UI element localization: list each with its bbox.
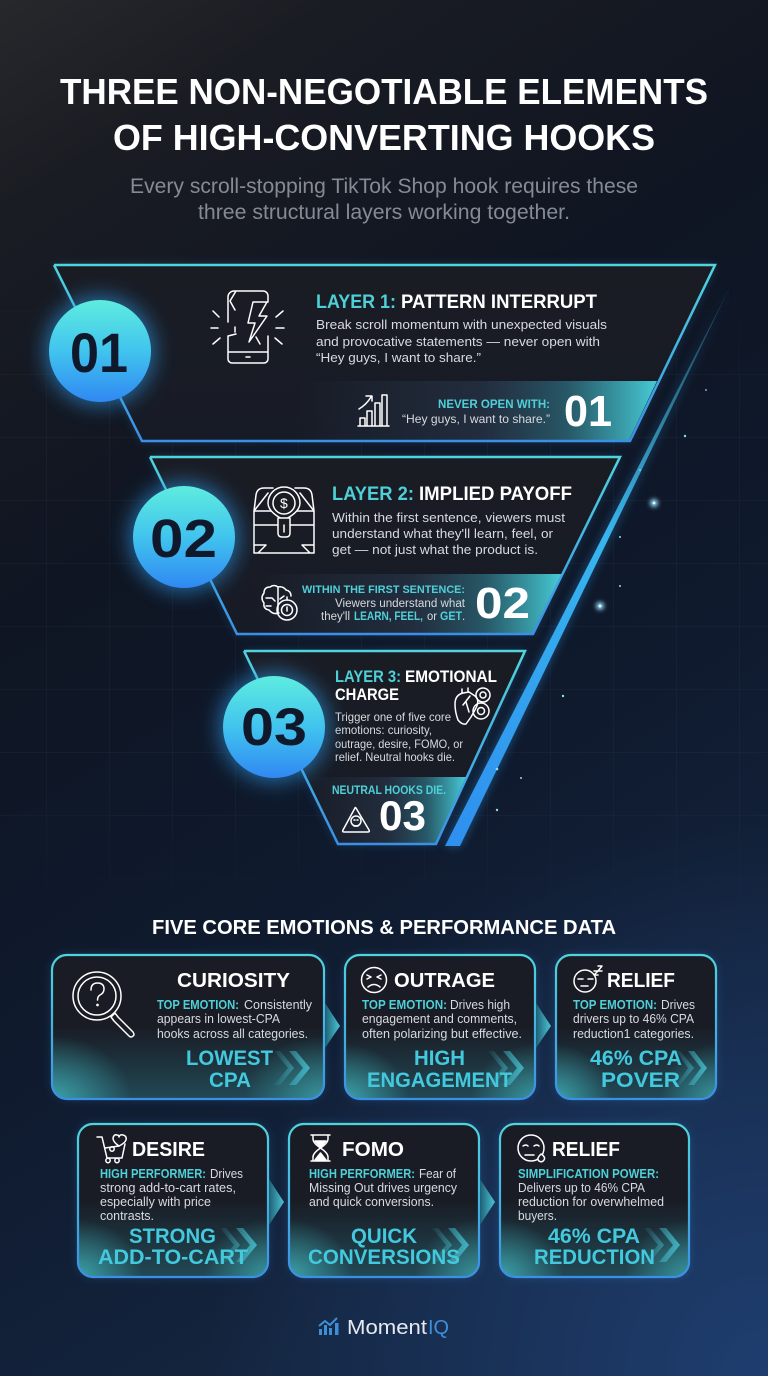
curiosity description: TOP EMOTION: [157,998,239,1012]
outrage metric: HIGH [414,1046,465,1070]
chevrons [488,1051,524,1085]
relief simplification metric: 46% CPA [548,1224,640,1248]
layer 2 callout [302,579,530,628]
section heading: FIVE CORE EMOTIONS & PERFORMANCE DATA [152,916,616,939]
outrage metric [367,1046,512,1092]
subtitle [130,175,638,224]
relief simplification heading: RELIEF [552,1139,620,1161]
layer 3 callout: 03 [379,792,426,839]
outrage description: engagement and comments, [362,1012,517,1026]
icon: magnifying glass with question mark [73,972,134,1037]
relief description: reduction1 categories. [573,1027,694,1041]
layer 1 description: Break scroll momentum with unexpected visuals [316,317,608,332]
outrage metric: ENGAGEMENT [367,1068,512,1092]
desire description: HIGH PERFORMER: [100,1167,206,1181]
layer 2 callout: or [427,611,437,623]
icon: anatomical heart with emotion faces [455,688,490,724]
number badge 02 [129,482,239,592]
desire description: contrasts. [100,1209,154,1223]
relief description: Drives [661,998,695,1012]
chevrons [432,1228,469,1262]
fomo metric: CONVERSIONS [308,1245,460,1269]
relief simplification description: Delivers up to 46% CPA [518,1181,646,1195]
relief simplification description: reduction for overwhelmed [518,1195,664,1209]
layer 3 heading: LAYER 3: [335,668,401,686]
sparkle particles [496,389,707,811]
icon: rising bar chart [358,395,389,426]
relief metric: 46% CPA [590,1046,682,1070]
icon: warning triangle with skull [343,808,369,832]
layer 1 description: and provocative statements — never open with [316,334,600,349]
fomo description [309,1167,458,1209]
chevrons [220,1228,257,1262]
icon: shopping cart with heart [97,1135,126,1163]
layer 1 heading [316,292,597,313]
layer 2 heading: IMPLIED PAYOFF [419,484,572,505]
fomo description: Fear of [419,1167,456,1181]
subtitle: three structural layers working together. [198,201,570,224]
desire description: Drives [210,1167,243,1181]
layer 2 description: get — not just what the product is. [332,542,538,557]
outrage description [362,998,522,1041]
icon: brain with stopwatch [262,586,297,620]
number badge 01 [45,296,155,406]
layer 2 callout: WITHIN THE FIRST SENTENCE: [302,584,465,596]
icon: sleeping face [574,966,602,992]
curiosity metric: CPA [209,1068,251,1092]
outrage description: often polarizing but effective. [362,1027,522,1041]
fomo metric: QUICK [351,1224,417,1248]
curiosity description: Consistently [244,998,313,1012]
logo mark [319,1318,338,1335]
layer 2 description: Within the first sentence, viewers must [332,510,565,525]
icon: treasure chest with coin [254,487,314,553]
relief metric [590,1046,682,1092]
fomo metric [308,1224,460,1269]
icon: treasure chest with coin: $ [280,495,288,511]
outrage description: TOP EMOTION: [362,998,447,1012]
logo: MomentIQ [319,1316,449,1339]
chevrons [644,1228,680,1262]
desire heading: DESIRE [132,1139,205,1161]
logo: MomentIQ: IQ [428,1316,449,1339]
layer 2 callout: Viewers understand what [335,598,466,610]
layer 1 callout: “Hey guys, I want to share.” [402,412,550,426]
arrow: fomo to relief [480,1179,495,1225]
outrage heading: OUTRAGE [394,970,495,992]
layer 1 callout: 01 [564,387,612,436]
layer 2 callout: GET [440,611,462,623]
layer 2 callout: they'll [321,611,350,623]
desire metric: ADD-TO-CART [98,1245,248,1269]
layer 3 callout: NEUTRAL HOOKS DIE. [332,785,446,797]
panel: layer 1 pattern interrupt [45,265,715,441]
panel: layer 2 implied payoff [129,457,620,634]
layer 1 callout [402,387,612,436]
layer 2 heading: LAYER 2: [332,484,414,505]
curiosity metric [186,1046,273,1092]
subtitle: Every scroll-stopping TikTok Shop hook requires these [130,175,638,198]
diagonal light beam [445,283,732,846]
layer 2 callout: . [462,611,465,623]
icon: hourglass [311,1135,330,1161]
layer 1 heading: LAYER 1: [316,292,396,313]
layer 1 description: “Hey guys, I want to share.” [316,350,481,365]
arrow: curiosity to outrage [325,1003,340,1048]
outrage description: Drives high [450,998,510,1012]
panel: layer 3 emotional charge [219,651,525,844]
layer 2 description: understand what they'll learn, feel, or [332,526,554,541]
icon: angry face [362,968,386,992]
card: outrage [345,955,535,1099]
relief simplification metric: REDUCTION [534,1245,655,1269]
fomo description: HIGH PERFORMER: [309,1167,415,1181]
card: fomo [289,1124,479,1277]
card: curiosity [52,955,324,1099]
curiosity description: appears in lowest-CPA [157,1012,281,1026]
card: desire [78,1124,268,1277]
curiosity description [157,998,313,1041]
layer 1 heading: PATTERN INTERRUPT [401,292,597,313]
layer 3 description: outrage, desire, FOMO, or [335,737,463,751]
layer 3 heading: EMOTIONAL [405,668,497,686]
relief heading: RELIEF [607,970,675,992]
number badge 03: 03 [241,698,307,757]
desire description: strong add-to-cart rates, [100,1181,236,1195]
desire description: especially with price [100,1195,211,1209]
arrow: desire to fomo [269,1179,284,1225]
desire metric [98,1224,248,1269]
fomo description: Missing Out drives urgency [309,1181,458,1195]
layer 3 description: Trigger one of five core [335,710,451,724]
layer 2 heading [332,484,572,505]
number badge 02: 02 [150,509,217,569]
title: THREE NON-NEGOTIABLE ELEMENTS [60,71,708,112]
number badge 03 [219,672,329,782]
layer 1 description [316,317,608,365]
layer 3 description [335,710,463,764]
arrow: outrage to relief [536,1003,551,1048]
desire metric: STRONG [129,1224,216,1248]
curiosity heading: CURIOSITY [177,970,291,992]
layer 3 description: relief. Neutral hooks die. [335,750,455,764]
relief description [573,998,695,1041]
icon: shattered phone with lightning [211,291,284,363]
title [60,71,708,158]
relief simplification description [518,1167,664,1223]
number badge 01: 01 [70,321,128,384]
card: relief [556,955,716,1099]
relief description: TOP EMOTION: [573,998,657,1012]
fomo heading: FOMO [342,1139,404,1161]
relief simplification description: buyers. [518,1209,557,1223]
layer 1 callout: NEVER OPEN WITH: [438,399,550,411]
relief metric: POVER [601,1068,680,1092]
logo: MomentIQ: Moment [347,1316,427,1339]
layer 3 description: emotions: curiosity, [335,723,432,737]
chevrons [676,1051,707,1085]
layer 2 callout: 02 [475,579,530,628]
curiosity description: hooks across all categories. [157,1027,308,1041]
title: OF HIGH-CONVERTING HOOKS [113,117,655,158]
card: relief simplification [500,1124,689,1277]
relief simplification metric [534,1224,655,1269]
chevrons [274,1051,310,1085]
layer 2 description [332,510,565,557]
layer 3 heading [335,668,497,704]
icon: relieved face with tear [518,1135,545,1162]
layer 3 callout [332,785,446,839]
relief simplification description: SIMPLIFICATION POWER: [518,1167,659,1181]
curiosity metric: LOWEST [186,1046,273,1070]
layer 3 heading: CHARGE [335,686,399,704]
relief description: drivers up to 46% CPA [573,1012,695,1026]
desire description [100,1167,243,1223]
layer 2 callout: LEARN, FEEL, [354,611,423,623]
fomo description: and quick conversions. [309,1195,434,1209]
